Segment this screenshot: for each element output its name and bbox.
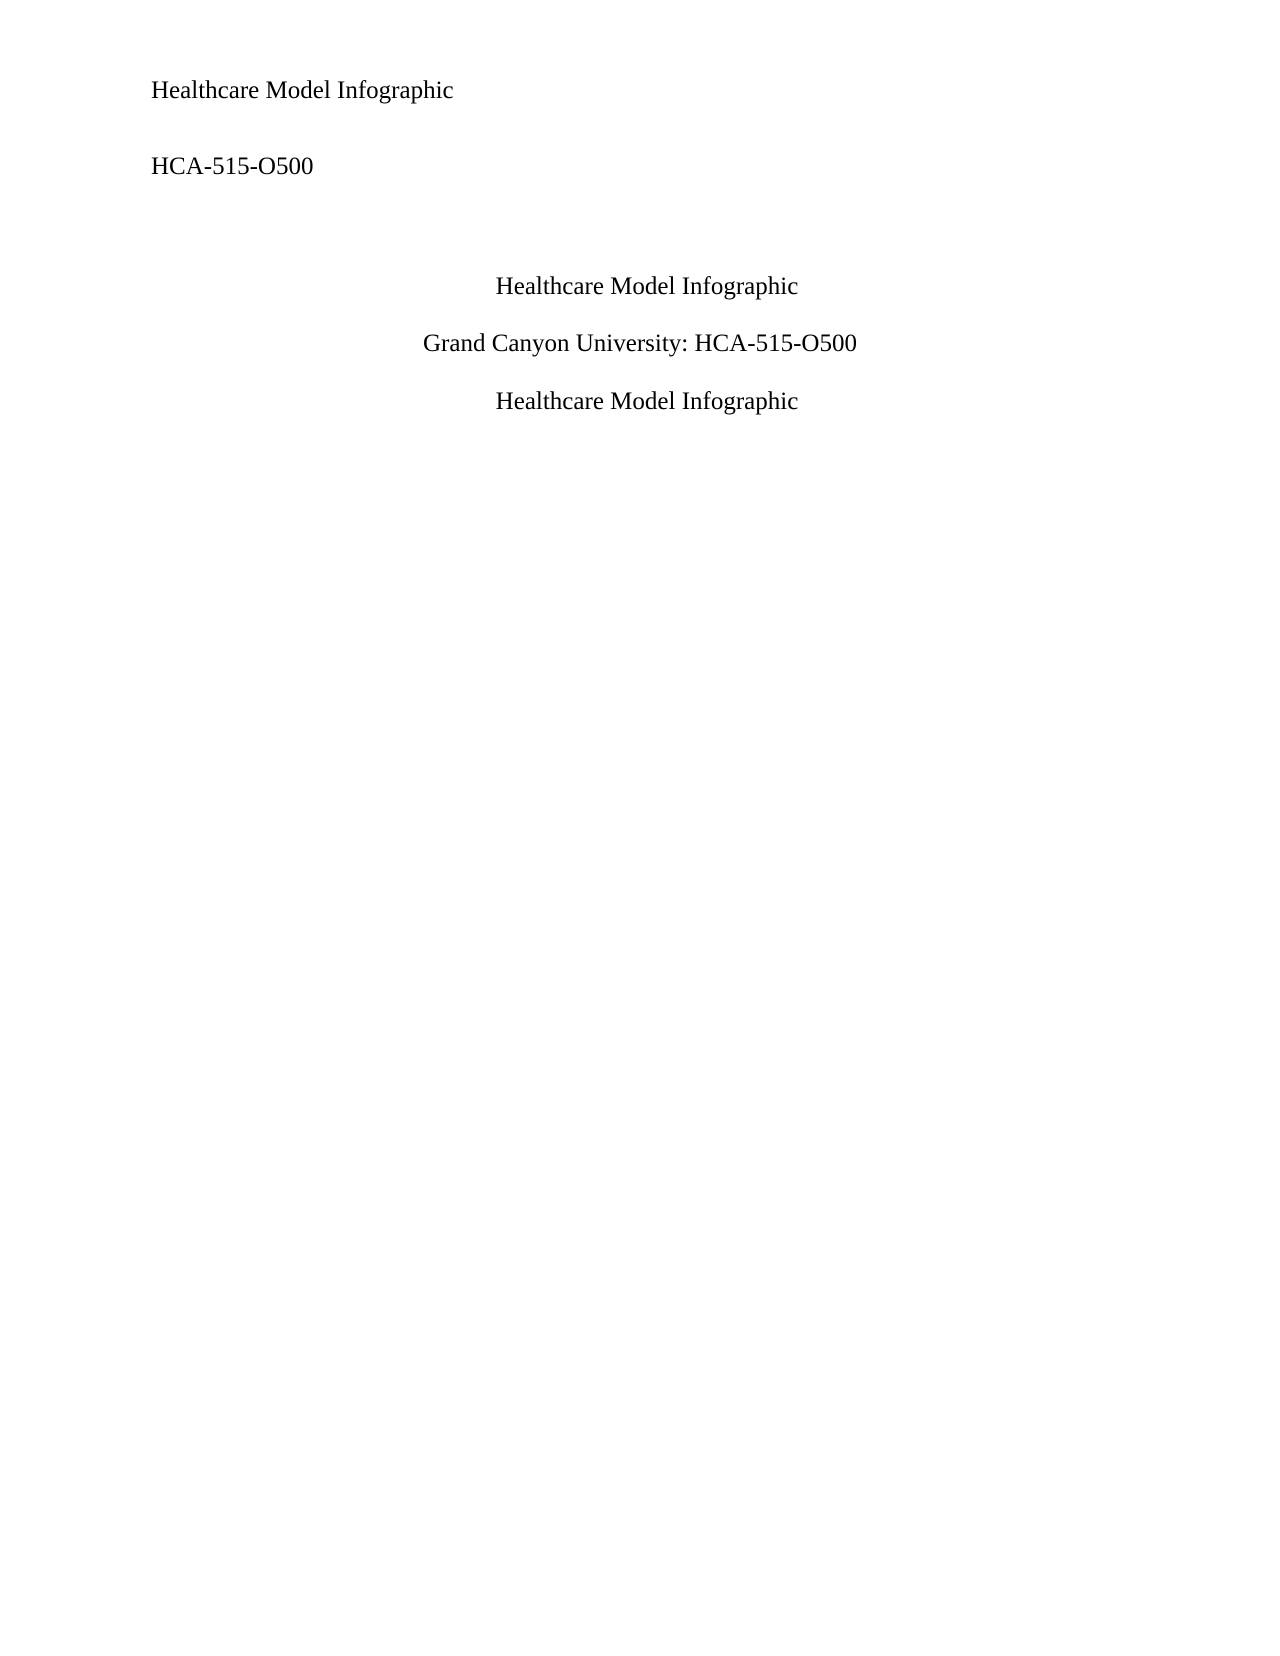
subtitle: Healthcare Model Infographic	[496, 388, 798, 415]
title: Healthcare Model Infographic	[496, 273, 798, 300]
running head: Healthcare Model Infographic	[151, 77, 454, 104]
institution line: Grand Canyon University: HCA-515-O500	[423, 330, 857, 357]
course code: HCA-515-O500	[151, 153, 314, 180]
